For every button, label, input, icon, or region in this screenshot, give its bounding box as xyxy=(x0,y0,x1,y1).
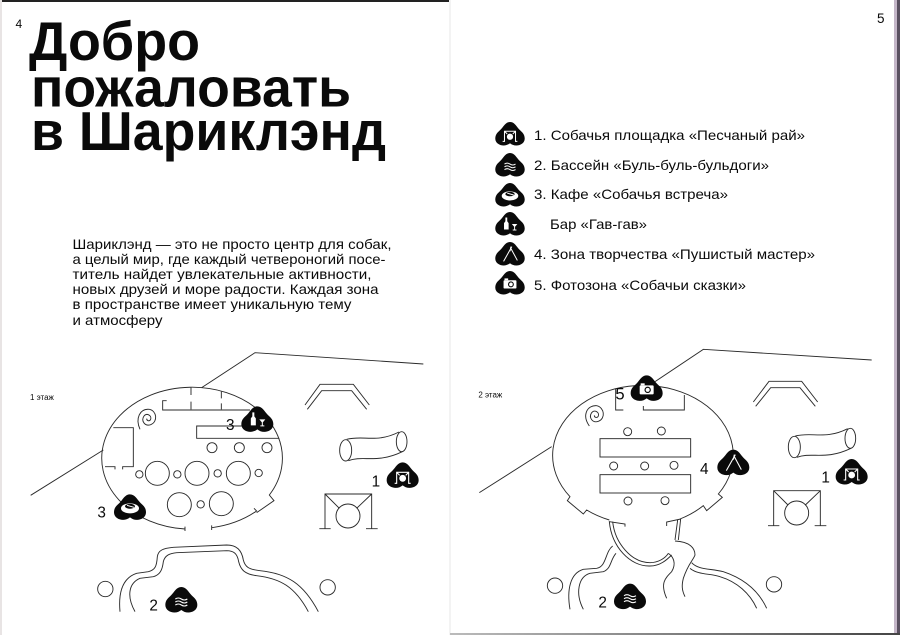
intro text block: новых друзей и море радости. Каждая зона xyxy=(72,281,379,297)
legend item 5: photo zone xyxy=(495,271,746,294)
icon: pool xyxy=(614,584,646,609)
floor 2 zone numbers: 4 xyxy=(700,461,709,478)
legend item 1: sand playground: 1. Собачья площадка «Песчаный рай» xyxy=(534,127,805,143)
intro text block xyxy=(72,236,392,328)
legend item 3: cafe xyxy=(495,183,728,206)
floor 2 zone numbers xyxy=(598,384,830,612)
floor 1 hall outline xyxy=(102,387,282,531)
icon: pool xyxy=(165,587,197,612)
floor 2 outdoor structures xyxy=(753,381,856,526)
title xyxy=(29,10,386,162)
page number 4: 4 xyxy=(16,17,22,31)
intro text block: а целый мир, где каждый четвероногий посе- xyxy=(72,251,386,267)
floor 2 plan xyxy=(478,349,872,612)
floor 1 zone numbers: 3 xyxy=(226,417,235,434)
legend item: bar: Бар «Гав-гав» xyxy=(550,216,647,232)
floor 2 counters xyxy=(600,427,691,505)
icon: playground xyxy=(387,462,419,488)
icon: camera xyxy=(631,375,663,401)
icon: bar xyxy=(241,406,273,432)
floor 2 label: 2 этаж xyxy=(478,390,503,399)
floor 1 tables xyxy=(136,443,272,517)
icon: cafe xyxy=(114,494,146,520)
floor 2 hall outline xyxy=(553,385,733,520)
floor 1 outdoor structures xyxy=(305,384,407,529)
legend item 1: sand playground xyxy=(495,122,805,146)
legend item 4: craft zone: 4. Зона творчества «Пушистый мастер» xyxy=(534,246,815,262)
title: в Шариклэнд xyxy=(31,100,386,162)
legend item 2: pool xyxy=(495,153,769,176)
floor 1 pool xyxy=(98,545,335,612)
floor 1 zone numbers: 2 xyxy=(149,598,158,615)
legend item 2: pool: 2. Бассейн «Буль-буль-бульдоги» xyxy=(534,157,769,173)
icon: playground xyxy=(836,459,868,484)
legend item 4: craft zone xyxy=(495,242,815,266)
legend item: bar xyxy=(495,212,647,236)
intro text block: в пространстве имеет уникальную тему xyxy=(72,296,352,312)
legend item 5: photo zone: 5. Фотозона «Собачьи сказки» xyxy=(534,277,746,293)
floor 2 zone numbers: 2 xyxy=(598,595,607,612)
page number 5: 5 xyxy=(877,11,885,26)
building walls xyxy=(31,353,423,495)
building walls xyxy=(479,349,872,493)
floor 1 label: 1 этаж xyxy=(30,393,55,402)
icon: craft xyxy=(717,450,749,475)
legend xyxy=(495,122,815,294)
floor 2 zone numbers: 1 xyxy=(821,470,830,487)
legend item 3: cafe: 3. Кафе «Собачья встреча» xyxy=(534,186,728,202)
floor 1 zone numbers: 3 xyxy=(97,504,106,521)
floor 1 zone numbers xyxy=(97,417,380,615)
floor 2 spiral xyxy=(586,406,603,426)
title: пожаловать xyxy=(31,56,351,118)
floor 2 stairs and pool xyxy=(547,519,782,609)
floor 1 plan xyxy=(30,353,423,615)
intro text block: Шариклэнд — это не просто центр для собак, xyxy=(72,236,392,252)
intro text block: титель найдет увлекательные активности, xyxy=(72,266,372,282)
floor 2 zone numbers: 5 xyxy=(615,384,625,403)
floor 1 zone numbers: 1 xyxy=(372,474,380,491)
floor 2 inner rooms xyxy=(616,388,684,410)
floor 1 spiral xyxy=(138,409,156,429)
title: Добро xyxy=(29,10,200,72)
floor 1 inner rooms xyxy=(105,388,279,469)
intro text block: и атмосферу xyxy=(72,312,162,328)
